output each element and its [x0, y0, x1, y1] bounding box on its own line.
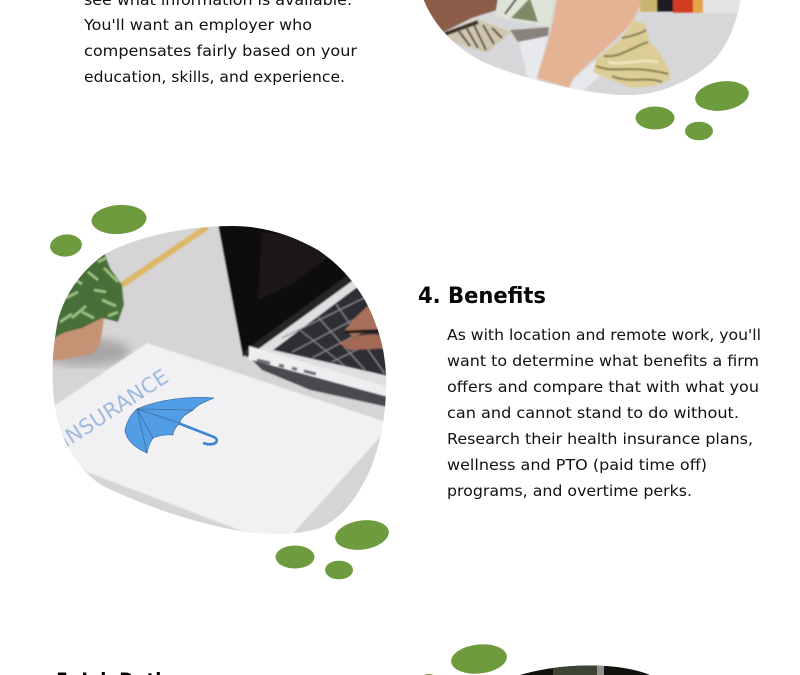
text block: benefits description	[447, 326, 761, 500]
pencil	[122, 227, 207, 285]
decorative green dots: benefits photo bottom	[276, 517, 391, 579]
plant pot shadow	[40, 338, 130, 366]
text block: benefits description: Research their health insurance plans,	[447, 430, 753, 448]
decorative green dots: benefits photo top	[49, 203, 147, 258]
text block: benefits description: programs, and overtime perks.	[447, 482, 692, 500]
photo blob: hands with craft materials	[424, 0, 740, 95]
photo blob: insurance document and laptop	[40, 220, 392, 540]
paper	[45, 343, 392, 540]
text block: pay section ending: compensates fairly based on your	[84, 42, 358, 60]
text block: pay section ending: education, skills, and experience.	[84, 68, 345, 86]
decorative green dots: first photo	[636, 78, 751, 140]
text block: benefits description: wellness and PTO (paid time off)	[447, 456, 707, 474]
plant foliage	[50, 252, 124, 340]
text block: benefits description: want to determine what benefits a firm	[447, 352, 759, 370]
hand	[344, 305, 378, 336]
heading: 4. Benefits: 4. Benefits	[418, 283, 546, 309]
laptop screen	[218, 226, 348, 358]
text block: benefits description: As with location and remote work, you'll	[447, 326, 761, 344]
text block: pay section ending: You'll want an employer who	[83, 16, 312, 34]
text block: benefits description: offers and compare that with what you	[447, 378, 759, 396]
icon: umbrella	[125, 397, 217, 453]
photo blob: next section, cut off at bottom	[520, 666, 650, 675]
text block: benefits description: can and cannot stand to do without.	[447, 404, 739, 422]
laptop base	[246, 280, 386, 386]
decorative green dots: next photo	[421, 642, 508, 675]
plant pot	[52, 317, 104, 362]
paper label: INSURANCE: INSURANCE	[56, 365, 173, 452]
text block: pay section ending	[83, 0, 358, 86]
